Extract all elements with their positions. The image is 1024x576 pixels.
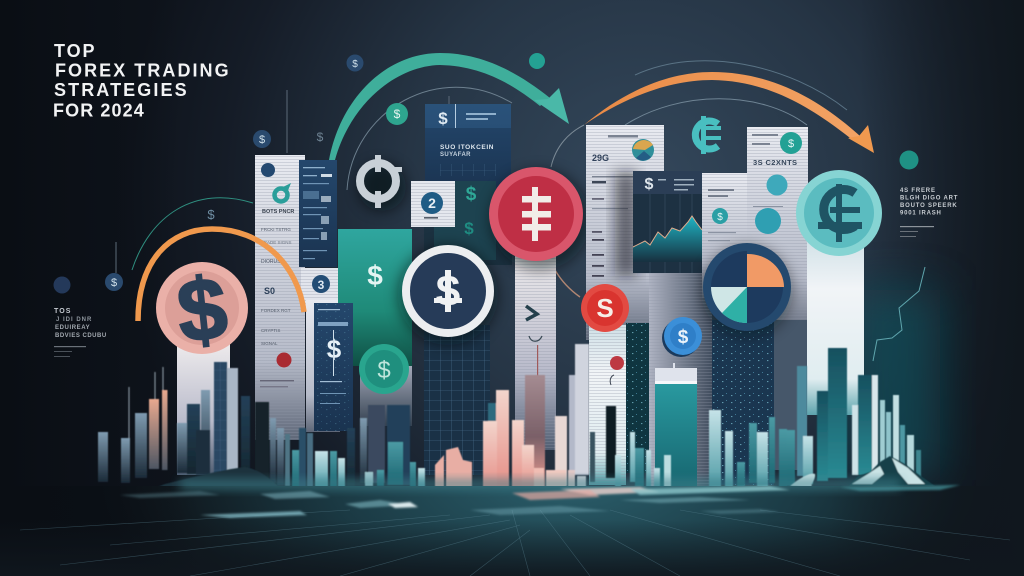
left pillar under pink coin [177, 340, 230, 475]
panel: tall sheet with teal badges: 3S C2XNTS [753, 158, 797, 167]
chart: right thin trend line [873, 267, 925, 361]
column: striped grey tower [649, 273, 712, 498]
arrow: orange arc [584, 72, 874, 153]
arrow: teal arc [329, 53, 569, 160]
arc: orange around pink coin [138, 229, 304, 321]
column: dark grid tower [424, 325, 490, 475]
panel: paper with 2 badge: 2 [428, 195, 436, 211]
coin: white ring dollar: $ [436, 267, 460, 316]
thin decorative arcs [116, 61, 847, 297]
panel: paper with 2 badge [411, 181, 455, 227]
coin: pink dollar: $ [173, 258, 232, 361]
coin: blue S: $ [678, 327, 689, 348]
panel: dark teal card with dollars: $ [466, 184, 477, 205]
panel: report sheet with pie badge [586, 125, 664, 340]
coin: pink dollar [156, 258, 248, 361]
panel: line chart card: $ [645, 176, 654, 193]
title [53, 41, 231, 120]
title: FOREX TRADING [55, 60, 231, 80]
panel: white report column: BOTS PNCR [262, 209, 294, 215]
coin: green symbol [359, 344, 409, 394]
title: FOR 2024 [53, 100, 145, 120]
skyline: central pink city [435, 344, 616, 491]
coin: red S [581, 284, 629, 332]
skyline: left blue city [98, 362, 425, 488]
panel: navy strategy sheet: $ [438, 109, 448, 128]
rock mounds [150, 456, 935, 490]
icon: arrow chevron and small marks [526, 306, 542, 377]
panel: dark teal card with dollars: $ [464, 219, 474, 238]
coin: red with cross symbol [489, 167, 590, 270]
column: grey tower [774, 320, 807, 470]
text block: right notes: BLGH DIGO ART [900, 196, 958, 202]
panel: white report column: CRYPTIS [261, 328, 280, 333]
text block: left notes: TOS [54, 308, 72, 315]
text block: left notes: EDUIREAY [55, 325, 90, 331]
small icons: floating badges [54, 53, 918, 294]
panel: teal dollar card: $ [367, 260, 383, 291]
panel: paper with number badge: 3 [318, 278, 325, 292]
panel: white report column: FRCKI TSTRG [261, 227, 291, 232]
icon: teal currency symbol [695, 116, 721, 154]
tower: teal cylinder [655, 363, 697, 488]
small icons: floating badges: $ [111, 277, 117, 289]
dark panel behind navy column [424, 185, 512, 265]
coin: blue S [662, 317, 702, 357]
panel: navy column with dollar [314, 303, 353, 431]
panel: paper with number badge [301, 268, 341, 432]
panel: navy strategy sheet [425, 104, 511, 194]
panel: navy column with dollar: $ [327, 334, 342, 364]
column: dark teal tower [626, 323, 649, 473]
small icons: floating badges: $ [207, 207, 215, 222]
panel: white report column [255, 155, 305, 440]
panel: dark teal card with dollars [434, 181, 496, 260]
panel: white report column: FORDEX RGT [261, 308, 291, 313]
panel: line chart card [615, 171, 702, 276]
panel: report sheet with pie badge: 29G [592, 153, 609, 163]
panel: teal dollar card [338, 229, 412, 366]
skyline: right teal city [615, 348, 921, 488]
coin: red S: S [596, 293, 614, 323]
text block: right notes: 9001 IRASH [900, 210, 942, 216]
panel: white report column: TRADE SIGNS [261, 240, 292, 245]
ground plane [0, 480, 1024, 576]
column: grey block below green coin [360, 366, 412, 426]
text block: right notes [900, 188, 958, 237]
panel: side sheet with teal badge [702, 173, 747, 298]
panel: white report column: S0 [264, 286, 275, 296]
small icons: floating badges: $ [317, 130, 324, 144]
panel: side sheet with teal badge: $ [717, 212, 723, 223]
text block: right notes: 4S FRERE [900, 188, 936, 194]
small icons: floating badges: $ [394, 107, 401, 121]
coin: right teal currency [796, 170, 882, 256]
column: pale tower beneath right coin [807, 235, 864, 415]
column: white tower with red marks [589, 325, 626, 485]
text block: left notes: BDVIES CDUBU [55, 333, 107, 339]
icon: grey ring coin [358, 155, 406, 211]
small icons: floating badges: $ [352, 59, 358, 70]
panel: navy strategy sheet: SUO ITOKCEIN [440, 144, 494, 151]
coin: white ring dollar [398, 245, 498, 345]
coin: pie chart [701, 243, 793, 337]
title: STRATEGIES [54, 80, 189, 100]
small icons: floating badges: $ [259, 134, 265, 146]
panel: tall sheet with teal badges: $ [788, 138, 794, 150]
panel: white report column: DIORUS [261, 259, 281, 265]
panel: navy text sheet [299, 160, 337, 267]
text block: left notes [54, 308, 107, 357]
coin: green symbol: $ [377, 357, 391, 384]
title: TOP [54, 41, 96, 61]
panel: tall sheet with teal badges [747, 127, 808, 337]
text block: right notes: BOUTO SPEERK [900, 203, 958, 209]
panel: white report column: SIGNAL [261, 341, 278, 346]
panel: navy strategy sheet: SUYAFAR [440, 152, 471, 158]
column: white tower under red coin [515, 250, 556, 450]
column: navy dotted tower [712, 320, 774, 485]
text block: left notes: J IDI DNR [56, 317, 92, 323]
